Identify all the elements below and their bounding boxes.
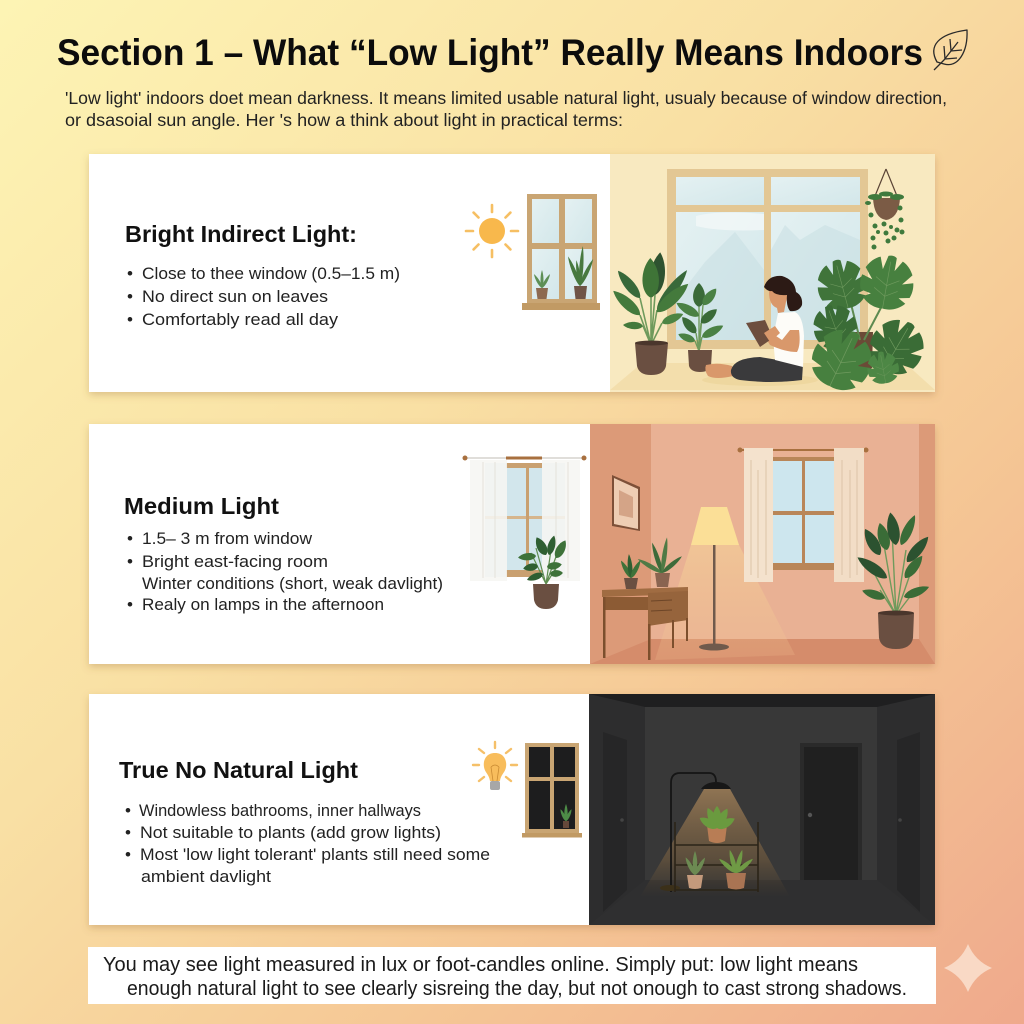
hanging plant bbox=[865, 169, 904, 250]
illustration: dark hallway with grow light bbox=[589, 694, 935, 925]
intro text bbox=[65, 88, 947, 130]
plant shelf bbox=[675, 822, 758, 892]
panel 3 card bbox=[89, 694, 935, 925]
bullet list: medium: 1.5– 3 m from window bbox=[142, 529, 313, 548]
bullet list: bright indirect: Close to thee window (0.5–1.5 m) bbox=[142, 264, 400, 283]
intro text: 'Low light' indoors doet mean darkness. It means limited usable natural light, usualy because of window direction, bbox=[65, 88, 947, 108]
icon: curtained window with plant bbox=[462, 456, 586, 609]
room walls and floor bbox=[590, 424, 935, 664]
bullet list: bright indirect: • bbox=[127, 287, 133, 306]
heading: bright indirect light: Bright Indirect Light: bbox=[125, 221, 357, 247]
bullet list: bright indirect bbox=[127, 264, 400, 329]
bullet list: medium: Realy on lamps in the afternoon bbox=[142, 595, 384, 614]
grow light cone bbox=[640, 789, 790, 897]
panel 2 card bbox=[89, 424, 935, 664]
plant: left floor plant bbox=[610, 251, 692, 375]
icon: dark window bbox=[522, 743, 582, 838]
bullet list: medium: Bright east-facing room bbox=[142, 552, 328, 571]
bullet list: medium: Winter conditions (short, weak davlight) bbox=[142, 574, 443, 593]
panel: true no natural light bbox=[89, 694, 935, 925]
framed picture bbox=[612, 475, 640, 531]
desk plants bbox=[619, 537, 683, 589]
wooden desk bbox=[602, 587, 688, 660]
icon: sparkle star bbox=[944, 944, 992, 992]
side and back doors bbox=[603, 732, 920, 912]
bullet list: no natural light: Not suitable to plants (add grow lights) bbox=[140, 823, 441, 842]
callout: lux and foot-candles note bbox=[88, 947, 936, 1004]
title: Section 1 – What “Low Light” Really Means Indoors bbox=[57, 32, 923, 73]
heading: true no natural light: True No Natural Light bbox=[119, 757, 358, 783]
panel 1 card bbox=[89, 154, 935, 392]
bullet list: medium: • bbox=[127, 595, 133, 614]
plant: small floor plant bbox=[674, 283, 725, 372]
bullet list: medium: • bbox=[127, 529, 133, 548]
plant: large potted plant bbox=[854, 511, 932, 649]
bullet list: no natural light: • bbox=[125, 823, 131, 842]
bullet list: bright indirect: No direct sun on leaves bbox=[142, 287, 328, 306]
bullet list: no natural light: Windowless bathrooms, inner hallways bbox=[139, 801, 421, 820]
bullet list: bright indirect: • bbox=[127, 310, 133, 329]
room wall and floor bbox=[610, 154, 935, 392]
grow-lit plants bbox=[684, 806, 754, 890]
icon: small window with plants bbox=[522, 194, 600, 310]
intro text: or dsasoial sun angle. Her 's how a think about light in practical terms: bbox=[65, 110, 623, 130]
hallway walls and floor bbox=[589, 694, 935, 925]
heading: medium light: Medium Light bbox=[124, 493, 279, 519]
window with curtains bbox=[738, 448, 868, 582]
figure: seated woman reading bbox=[702, 276, 818, 386]
bullet list: no natural light: ambient davlight bbox=[141, 867, 271, 886]
bullet list: bright indirect: • bbox=[127, 264, 133, 283]
icon: leaf outline bbox=[934, 30, 967, 70]
icon: sun bbox=[466, 205, 518, 257]
bullet list: medium bbox=[127, 529, 443, 614]
floor lamp bbox=[691, 507, 739, 650]
grow lamp bbox=[660, 773, 731, 892]
callout: lux and foot-candles note: enough natural light to see clearly sisreing the day, but not onough to cast strong shadows. bbox=[127, 977, 907, 1000]
bullet list: bright indirect: Comfortably read all day bbox=[142, 310, 339, 329]
panel: bright indirect light bbox=[89, 154, 935, 399]
large window bbox=[667, 169, 868, 349]
icon: light bulb bbox=[473, 742, 517, 790]
illustration: bright room with reading woman bbox=[610, 154, 935, 399]
plant: monstera bbox=[803, 251, 934, 399]
bullet list: no natural light: • bbox=[125, 801, 131, 820]
bullet list: medium: • bbox=[127, 552, 133, 571]
bullet list: no natural light: • bbox=[125, 845, 131, 864]
callout: lux and foot-candles note: You may see light measured in lux or foot-candles online. Simply put: low light means bbox=[103, 953, 858, 976]
bullet list: no natural light bbox=[125, 801, 490, 886]
bullet list: no natural light: Most 'low light tolerant' plants still need some bbox=[140, 845, 490, 864]
illustration: medium-lit room with lamp bbox=[590, 424, 935, 664]
floor lamp light cone bbox=[655, 545, 795, 660]
panel: medium light bbox=[89, 424, 935, 664]
